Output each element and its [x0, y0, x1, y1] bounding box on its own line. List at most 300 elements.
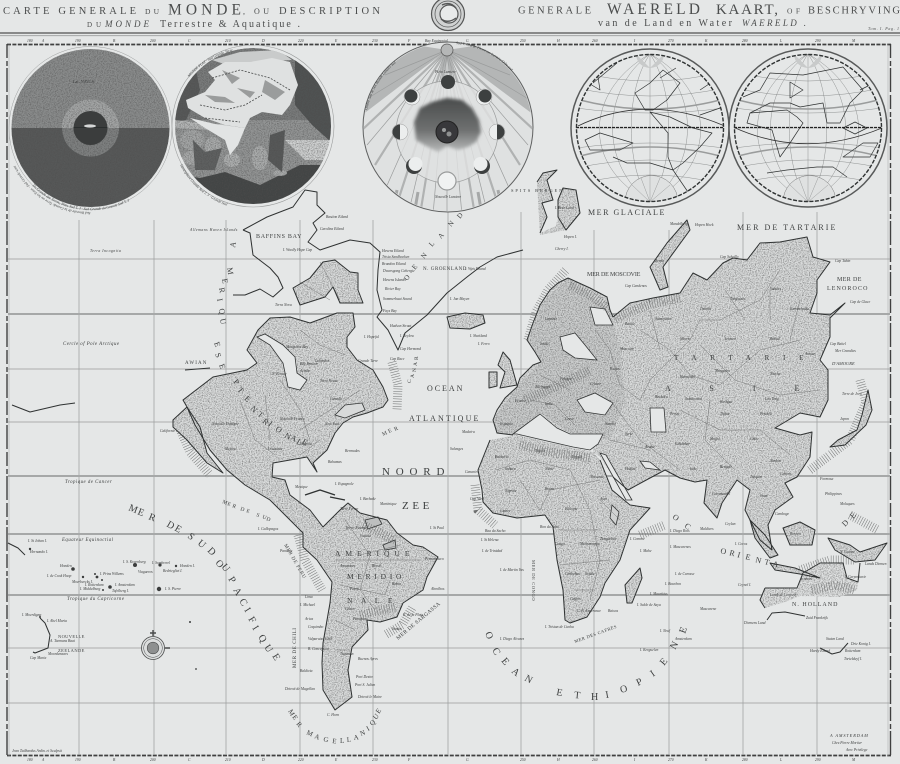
moon phases diagram	[362, 42, 534, 212]
lunar phases	[392, 75, 505, 190]
title: French: Terrestre & Aquatique .	[160, 19, 300, 30]
degree scale frame: 190	[75, 39, 81, 43]
small place names: Americas: Nouvelle France	[279, 417, 305, 421]
small place names: Africa: I. de Carosse	[674, 572, 695, 576]
title: Dutch	[518, 1, 900, 31]
small place names: Americas: Port Desire	[355, 675, 374, 679]
line and tropic labels: Tropique de Cancer	[65, 480, 112, 485]
graticule	[734, 54, 882, 202]
small place names: Americas: Detroit le Maire	[357, 695, 382, 699]
small place names: Americas: Chaco	[345, 607, 355, 611]
small place names: Africa: I. Mahe	[639, 549, 652, 553]
degree scale frame: B	[113, 39, 116, 43]
degree scale frame: F	[407, 758, 411, 762]
small place names: Europe and Asia: Lao Tong	[764, 397, 779, 401]
degree scale frame: 270	[668, 758, 674, 762]
small place names: Africa: I. Mauritius	[649, 592, 668, 596]
large sea and region labels: MER	[381, 426, 400, 438]
degree scale frame: 220	[298, 39, 304, 43]
land: Eurasia	[493, 237, 845, 550]
small place names: Europe and Asia: I. Ferro	[477, 342, 490, 346]
cosmos circle: land and water cross-section: Lat. NAVI.S.	[73, 79, 95, 84]
small place names: Europe and Asia: Persie	[669, 412, 680, 416]
small place names: Pacific and southern seas: Avec Privilege	[845, 748, 868, 752]
small place names: Americas: Havens Eiland	[381, 249, 404, 253]
small place names: Europe and Asia: Niuche	[769, 372, 781, 376]
degree scale frame: A	[41, 39, 45, 43]
small place names: Americas: Sommerbaai Sound	[383, 297, 412, 301]
degree scale frame: 260	[592, 39, 598, 43]
large sea and region labels: MER DE CONGO	[531, 560, 536, 601]
cosmos circle: land and water cross-section: Du Grande des Terres, Bitos Sud T. 1 · Sud Grande du Grande Sud T. 2	[32, 184, 129, 210]
title: Dutch: KAART,	[716, 2, 778, 18]
land: Nova Zembla	[650, 220, 690, 290]
small place names: Pacific and southern seas: I. Diego Alvarez	[499, 637, 525, 641]
land: New Holland	[760, 563, 860, 608]
map graticule	[8, 212, 890, 755]
terrestrial globe: Hemisphere Grande Sud T. 3 · Grande Sud	[180, 164, 228, 206]
small place names: Americas: Port S. Julien	[354, 683, 375, 687]
title: French: MONDE	[104, 19, 150, 29]
title: Dutch: van de Land en Water	[598, 18, 733, 29]
small place names: Americas: Cap Hermond	[400, 347, 421, 351]
small place names: Europe and Asia: Thibet	[720, 412, 730, 416]
degree scale frame: C	[188, 39, 191, 43]
country boundaries and rivers	[240, 262, 820, 650]
degree scale frame: 250	[520, 39, 526, 43]
small place names: Americas: Fays Bay	[382, 309, 397, 313]
small place names: Americas: New York	[324, 422, 339, 426]
sun	[441, 44, 453, 56]
small place names: Europe and Asia: Tonquin	[750, 475, 762, 479]
line and tropic labels: Equateur Equinoctial	[61, 538, 114, 543]
line and tropic labels: Allemans Haven Islands	[189, 228, 238, 232]
curved label: Mer de Sud ou Pacifique: MERDESUDOUPACIFIQUE	[127, 503, 282, 663]
land: Great Britain	[498, 352, 517, 388]
land: North America	[183, 313, 388, 533]
degree scale frame: 280	[742, 39, 748, 43]
small place names: Europe and Asia: Petcheli	[759, 412, 772, 416]
small place names: Europe and Asia: Suede	[540, 342, 549, 346]
small place names: Pacific and southern seas: I. Moerdigna	[21, 613, 41, 617]
small place names: Europe and Asia: Kalmouks	[679, 375, 695, 379]
small place names: Europe and Asia: Crimee	[590, 382, 601, 386]
large sea and region labels: MER DE CHILI	[293, 627, 298, 668]
small place names: Pacific and southern seas: Zuid Frankrijk	[806, 616, 828, 620]
large sea and region labels: AWIAN	[185, 361, 207, 366]
large sea and region labels: ZEELANDE	[58, 648, 85, 653]
small place names: Europe and Asia: Hedjaz	[624, 467, 636, 471]
curved label: Mer Magellanique: MERMAGELLANIQUE	[286, 707, 383, 746]
small place names: Americas: Arica	[304, 617, 313, 621]
small place names: Europe and Asia: Zemla	[655, 259, 664, 263]
terrestrial globe	[172, 44, 334, 208]
small place names: Pacific and southern seas: I. S. Kraenberg	[122, 560, 146, 564]
degree scale frame: I	[633, 758, 636, 762]
title medallion	[432, 0, 464, 30]
degree scale frame: 230	[372, 39, 378, 43]
small place names: Europe and Asia: Cap de Glace	[850, 300, 871, 304]
small place names: Americas: N. Ecosse	[271, 372, 287, 376]
degree scale frame: L	[779, 39, 782, 43]
small place names: Europe and Asia: Ienisea	[724, 337, 736, 341]
small place names: Europe and Asia: Arabie	[644, 445, 655, 449]
small place names: Europe and Asia: Samoyedes	[655, 317, 672, 321]
small place names: Africa: Borno	[545, 487, 554, 491]
small place names: Americas: Mexique	[294, 485, 308, 489]
degree scale frame: 280	[742, 758, 748, 762]
cosmos circle: land and water cross-section: Sud Boreale de la Grande Terre ou les Eaux · Sud Grande sont	[14, 166, 90, 214]
line and tropic labels: Cercle of Pole Arctique	[63, 342, 120, 347]
small place names: Africa: Tripoli	[535, 449, 545, 453]
small place names: Africa: Zanguebar	[600, 537, 617, 541]
degree scale frame: D	[261, 39, 265, 43]
small place names: Americas: Terra Nova	[275, 303, 292, 307]
small place names: Americas: Havens Islands	[382, 278, 406, 282]
land: Borneo	[783, 522, 815, 545]
small place names: Americas: Dwarsgong Gebergte	[382, 269, 415, 273]
title: Dutch: GENERALE	[518, 6, 591, 16]
small place names: Pacific and southern seas: I. St Helena	[480, 538, 499, 542]
small place names: Europe and Asia: Pologne	[559, 377, 573, 381]
small place names: Americas: B. Conception	[308, 647, 329, 651]
degree scale frame: 190	[75, 758, 81, 762]
small place names: Americas: Acadie	[299, 369, 311, 373]
small place names: Americas: Guiana	[360, 534, 371, 538]
large sea and region labels: TARTARIE	[674, 354, 804, 362]
small place names: Americas: Trisia Sandhoeken	[382, 255, 410, 259]
land: South America	[303, 503, 438, 710]
small place names: Africa	[450, 430, 695, 613]
small place names: Europe and Asia: I. Carpentarie	[844, 575, 866, 579]
title: French: DU	[87, 21, 101, 29]
small place names: Americas: Bahia	[392, 582, 401, 586]
small place names: Europe and Asia: Samarcand	[685, 397, 702, 401]
title: Dutch: WAERELD	[607, 1, 700, 18]
small place names: Pacific and southern seas: I. de Trinidad	[481, 549, 502, 553]
small place names: Europe and Asia: Amour	[804, 352, 816, 356]
small place names: Europe and Asia: Baikal	[770, 337, 780, 341]
small place names: Americas: Virginia	[300, 442, 312, 446]
small place names: Africa: Cap Verd	[470, 497, 484, 501]
small place names: Africa: Sahara	[505, 467, 516, 471]
small place names: Americas: R. de la Plata	[402, 613, 423, 617]
moon phases diagram: Sud T. Orb de Theatrum Lunaire Orbe sud	[456, 42, 514, 70]
small place names: Europe and Asia: Nankin	[769, 459, 781, 463]
small place names: Europe and Asia: Cap Candenos	[625, 284, 647, 288]
small place names: Pacific and southern seas: Amsterdam	[674, 637, 692, 641]
small place names: Americas: Carolina Eiland	[320, 227, 344, 231]
large sea and region labels	[58, 188, 868, 746]
small place names: Africa: I. Mascarenes	[669, 545, 691, 549]
large sea and region labels: MER DES CAFRES	[574, 624, 618, 644]
small place names: Pacific and southern seas: Hardy Eiland	[809, 649, 830, 653]
small place names: Pacific and southern seas: Staten Land	[826, 637, 844, 641]
title: French: , OU	[243, 7, 269, 16]
title: Dutch: OF	[787, 6, 800, 16]
small place names: Europe and Asia: Moluques	[839, 502, 855, 506]
small place names: Europe and Asia: N. Guinee	[839, 550, 855, 554]
small place names: Europe and Asia: Terre de Jeco	[842, 392, 862, 396]
land: Sumatra	[750, 520, 778, 558]
small place names: Pacific and southern seas: Diemens Land	[743, 621, 766, 625]
small place names: Africa: Salvages	[450, 447, 464, 451]
small place names: Europe and Asia: Mongales	[714, 369, 730, 373]
small place names: Europe and Asia: Kashgar	[719, 400, 733, 404]
land: Baja California	[173, 407, 223, 473]
large sea and region labels: ATLANTIQUE	[409, 414, 479, 423]
small place names: Americas: Buenos Ayres	[358, 657, 378, 661]
small place names: Pacific and southern seas: Honden I.	[179, 564, 195, 568]
degree scale frame: H	[556, 39, 560, 43]
small place names: Europe and Asia: Borneo	[790, 532, 801, 536]
small place names: Europe and Asia: I. Bear Land	[554, 206, 574, 210]
coast hatching on land	[360, 285, 855, 615]
small place names: Europe and Asia: Maldives	[699, 527, 714, 531]
small place names: Europe and Asia: Hopen I.	[563, 235, 577, 239]
small place names: Americas: I. Woolly Hope Cap	[282, 248, 312, 252]
graticule	[576, 54, 724, 202]
degree scale frame: B	[113, 758, 116, 762]
land: Africa	[478, 435, 650, 623]
land: New Guinea	[828, 538, 887, 562]
small place names: Pacific and southern seas: I. Neuf	[659, 629, 671, 633]
small place names: Pacific and southern seas: Ceynel I.	[738, 583, 751, 587]
small place names: Pacific and southern seas: I. St Johan I.	[27, 539, 47, 543]
land masses	[173, 170, 887, 710]
eastern hemisphere	[729, 49, 887, 207]
large sea and region labels: CANAR	[407, 356, 420, 383]
large sea and region labels: NOUVELLE	[58, 634, 85, 639]
moon phases diagram: Nouvelle Lumiere	[434, 195, 462, 199]
title: French	[3, 2, 380, 30]
degree scale frame: G	[466, 39, 469, 43]
degree scale frame: 230	[372, 758, 378, 762]
small place names: Americas: Bahamas	[328, 460, 342, 464]
small place names: Europe and Asia: Italie	[544, 402, 553, 406]
small place names: Africa: Barbarie	[495, 455, 509, 459]
large sea and region labels: LENOROCO	[827, 286, 868, 292]
cosmos circle: land and water cross-section	[8, 46, 172, 214]
small place names: Americas: Brandon Eiland	[382, 262, 406, 266]
small place names: Europe and Asia: Cap Tabin	[835, 259, 850, 263]
small place names: Europe and Asia: Hopen Hoek	[694, 223, 714, 227]
small place names: Pacific and southern seas: Tortelduyf I.	[844, 657, 862, 661]
large sea and region labels: OC	[671, 512, 693, 532]
small place names: Europe and Asia	[449, 206, 887, 597]
small place names: Europe and Asia: Yakutes	[770, 287, 782, 291]
large sea and region labels: MER DE PERU	[282, 544, 306, 580]
degree scale frame: 290	[815, 758, 821, 762]
degree scale frame: 180	[27, 39, 33, 43]
small place names: Europe and Asia: Candahar	[675, 442, 691, 446]
small place names: Europe and Asia: Bengale	[720, 465, 732, 469]
small place names: Americas: Terre Ferme	[345, 525, 367, 530]
small place names: Europe and Asia: Allemagne	[534, 385, 551, 389]
large sea and region labels: MERDESUD	[221, 499, 272, 524]
large sea and region labels: MER DE SARGASSA	[395, 601, 442, 642]
small place names: Africa: I. Comore	[629, 537, 645, 541]
small place names: Europe and Asia: Tongouses	[730, 297, 746, 301]
small place names: Pacific and southern seas: Hernando I.	[29, 550, 48, 554]
small place names: Europe and Asia: Cherry I.	[555, 247, 569, 251]
western hemisphere	[571, 49, 729, 207]
small place names: Africa: Cimbebas	[565, 572, 580, 576]
degree scale frame: 210	[225, 39, 231, 43]
large sea and region labels: ZEE	[402, 500, 430, 512]
top double rule	[0, 32, 900, 34]
land: Java	[770, 563, 820, 578]
land: denser Europe engraving	[493, 278, 625, 440]
degree scale frame: 200	[150, 758, 156, 762]
small place names: Americas: Labrador	[314, 359, 330, 363]
curved label: Ocean Ethiopiene: OCEANETHIOPIENE	[482, 625, 690, 703]
land: Japan	[830, 390, 872, 447]
large sea and region labels: BAFFINS BAY	[256, 234, 302, 240]
degree scale frame: D	[261, 758, 265, 762]
small place names: Pacific and southern seas: I. Sombrerel	[151, 561, 170, 565]
small place names: Americas: Chili	[325, 637, 332, 641]
small place names: Europe and Asia: Espagne	[499, 422, 513, 426]
small place names: Europe and Asia: Philippines	[824, 492, 842, 496]
small place names: Europe and Asia: I. Wyts Eiland	[464, 267, 486, 271]
land: Ireland	[489, 372, 497, 388]
small place names: Europe and Asia: Inde	[689, 467, 697, 471]
large sea and region labels: N. HOLLAND	[792, 602, 838, 608]
small place names: Americas: Bastion Eiland	[326, 215, 348, 219]
small place names: Pacific and southern seas: I. Tristan de Cunha	[544, 625, 574, 629]
small place names: Americas: Tucuman	[340, 652, 354, 656]
small place names: Pacific and southern seas: Cap Maria	[30, 656, 46, 660]
small place names: Europe and Asia: D'AMOURE	[831, 361, 855, 366]
small place names: Europe and Asia: Landt de Leeuwin	[769, 593, 797, 597]
title: French: DU	[145, 7, 160, 16]
coastal label hatching in the sea	[178, 270, 878, 635]
small place names: Americas: Mexico	[224, 447, 236, 451]
small place names: Americas: Louisiane	[267, 447, 283, 451]
degree scale frame: C	[188, 758, 191, 762]
degree scale frame: F	[407, 39, 411, 43]
large sea and region labels: MER DE MOSCOVIE	[587, 272, 641, 278]
degree scale frame: 200	[150, 39, 156, 43]
small place names: Europe and Asia: Moscovie	[619, 347, 634, 351]
small place names: Americas: Lima	[304, 595, 313, 599]
small place names: Europe and Asia: Coromandel	[712, 492, 730, 496]
small place names: Americas: I. Gallopagos	[257, 527, 279, 531]
coastline strokes	[8, 170, 887, 710]
small place names: Americas: Bay Brauwe	[300, 362, 318, 366]
small place names: Pacific and southern seas: Rotterdam	[844, 649, 861, 653]
small place names: Europe and Asia: Mogol	[709, 437, 720, 441]
small place names: Pacific and southern seas	[12, 529, 871, 753]
small place names: Pacific and southern seas: I. Rotterdam	[84, 583, 104, 587]
small place names: Europe and Asia: I. Jan Mayen	[449, 297, 470, 301]
small place names: Europe and Asia: Natolie	[604, 422, 616, 426]
moon phases diagram: Ombre Sud de Sol Monde Lunaire sud	[365, 61, 396, 110]
small place names: Americas: Abrolhos	[430, 587, 445, 591]
large sea and region labels: N. GROENLAND	[423, 267, 467, 272]
small place names: Americas: I. St Paul	[429, 526, 444, 530]
small place names: Americas: Nouvelle Espagne	[211, 422, 239, 426]
small place names: Americas: Hudson Straat	[389, 324, 412, 328]
small place names: Africa: I. Bourbon	[664, 582, 681, 586]
small place names: Europe and Asia: Kazan	[609, 367, 620, 371]
small place names: Americas: Cap Race	[390, 357, 405, 361]
small place names: Africa: Nubie	[544, 467, 554, 471]
small place names: Africa: Congo	[555, 542, 565, 546]
small place names: Europe and Asia: Formosa	[819, 477, 833, 481]
small place names: Pacific and southern seas: A AMSTERDAM	[829, 733, 869, 738]
small place names: Americas: Perou	[349, 587, 359, 591]
degree scale frame: 260	[592, 758, 598, 762]
curved label: Oriental: ORIENTA	[720, 546, 780, 569]
title: Dutch: BESCHRYVING	[808, 6, 900, 16]
small place names: Pacific and southern seas: Chez Pierre Mortier	[832, 741, 863, 745]
small place names: Europe and Asia: Siam	[760, 494, 768, 498]
large sea and region labels: DE	[840, 510, 858, 528]
degree scale frame: E	[334, 39, 338, 43]
small place names: Europe and Asia: Russie	[624, 322, 635, 326]
degree scale frame: 290	[815, 39, 821, 43]
line and tropic labels: Tropique du Capricorne	[67, 597, 125, 602]
small place names: Pacific and southern seas: I. Amsterdam	[114, 583, 135, 587]
compass rose	[142, 630, 170, 660]
small place names: Americas: I. Barbade	[359, 497, 376, 501]
degree scale frame: I	[633, 39, 636, 43]
title: French: MONDE	[168, 2, 241, 18]
degree scale frame: K	[704, 758, 708, 762]
small place names: Africa: Monomotapa	[579, 542, 600, 546]
small place names: Africa: Baixos	[608, 609, 619, 613]
small place names: Africa: Abissinie	[589, 475, 604, 479]
small place names: Africa: Nigritie	[504, 489, 517, 493]
degree scale frame: 180	[27, 758, 33, 762]
large sea and region labels: MER DE TARTARIE	[737, 223, 836, 232]
large sea and region labels: SPITS BERGEN	[511, 188, 563, 193]
large sea and region labels: NOORD	[382, 466, 445, 478]
line and tropic labels: Terra Incognita	[90, 249, 121, 253]
small place names: Europe and Asia: I. Cocos	[734, 542, 748, 546]
degree scale frame: 220	[298, 758, 304, 762]
small place names: Europe and Asia: Lands Diemen	[864, 562, 887, 566]
small place names: Pacific and southern seas: Viagueros	[138, 570, 153, 574]
degree scale frame: Bay Equinoxial	[425, 39, 448, 43]
small place names: Pacific and southern seas: I. Prins Willems	[99, 572, 124, 576]
small place names: Americas: C. Horn	[327, 713, 339, 717]
degree scale frame: 210	[225, 758, 231, 762]
large sea and region labels: AMERIQUE	[335, 549, 410, 558]
land: Iceland	[447, 313, 485, 329]
small place names: Americas: Rivier Bay	[384, 287, 401, 291]
degree scale frame: 250	[520, 758, 526, 762]
small place names: Europe and Asia: Japon	[840, 417, 849, 421]
small place names: Americas: Bresil	[372, 564, 381, 568]
small place names: Africa: Guinee	[500, 509, 511, 513]
small place names: Europe and Asia: Canton	[780, 472, 791, 476]
small place names: Americas: Paraguay	[352, 617, 368, 621]
small place names: Africa: Bon da Sabo	[540, 525, 559, 529]
small place names: Americas: Bermudes	[345, 449, 360, 453]
small place names: Pacific and southern seas: Baa da Sacho	[485, 529, 506, 533]
small place names: Africa: I. Sable de Saya	[636, 603, 661, 607]
small place names: Europe and Asia: Grece	[565, 417, 574, 421]
small place names: Europe and Asia: Cap Scheilly	[720, 255, 739, 259]
small place names: Europe and Asia: Kamtschatka	[789, 307, 809, 311]
small place names: Europe and Asia: France	[514, 399, 526, 403]
small place names: Pacific and southern seas: I. S. Pierre	[164, 587, 181, 591]
land: Spitsbergen	[537, 170, 580, 235]
large sea and region labels: MER DE	[837, 277, 862, 283]
